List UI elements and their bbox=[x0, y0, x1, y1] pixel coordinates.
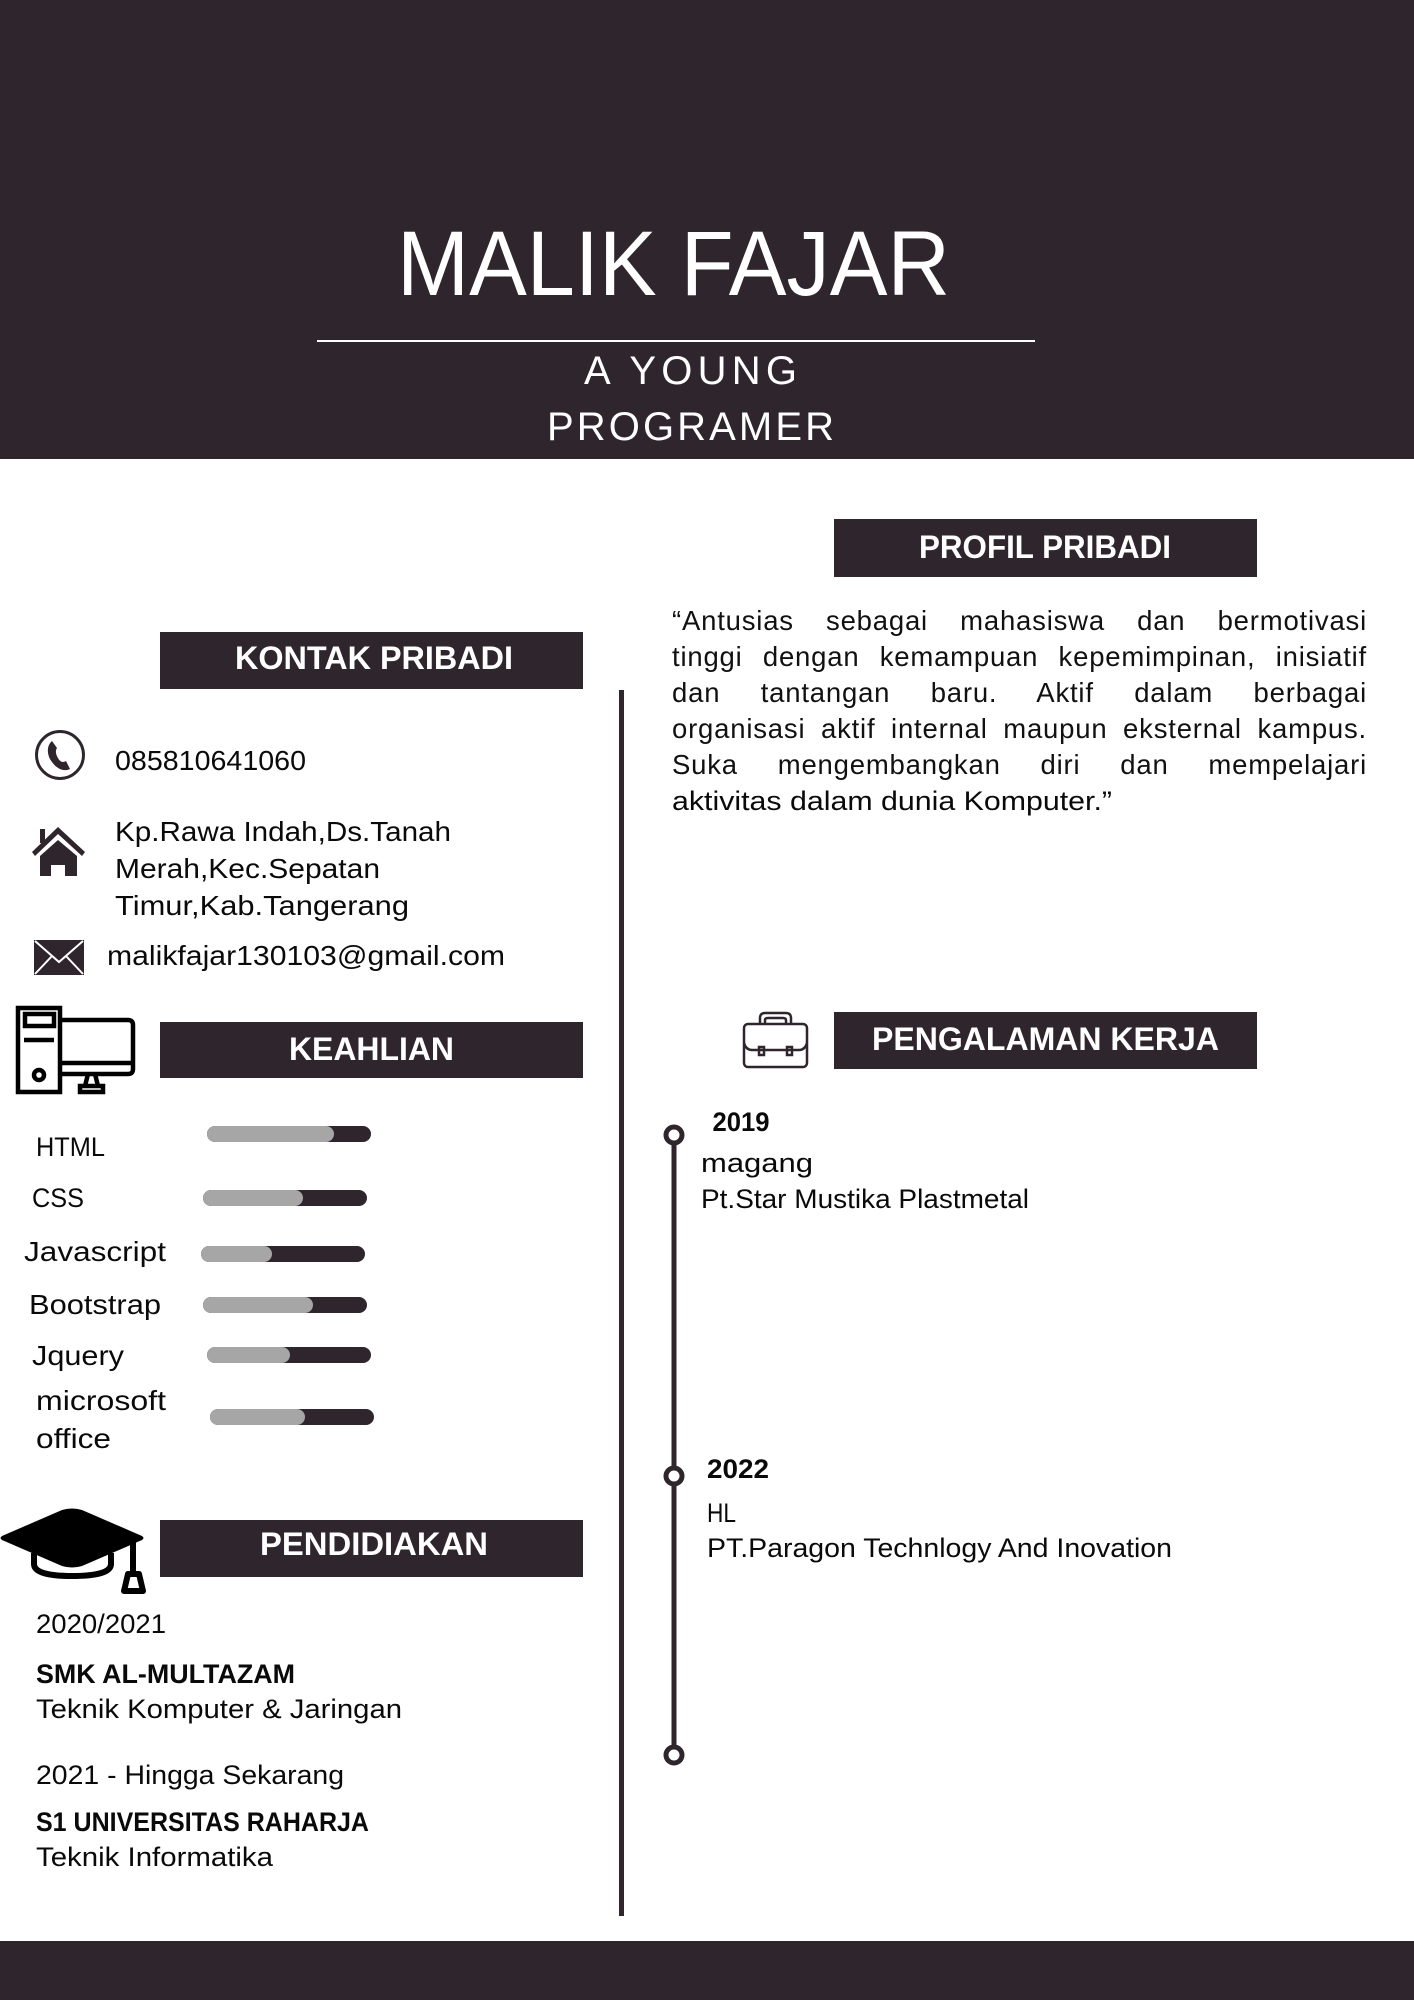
skill: css: CSS bbox=[32, 1183, 84, 1213]
icon: graduation cap bbox=[0, 1508, 144, 1591]
experience entry: 2019 bbox=[701, 1107, 1029, 1214]
address: Timur,Kab.Tangerang bbox=[115, 890, 409, 921]
skill: html: HTML bbox=[36, 1132, 105, 1162]
panel: profil pribadi bbox=[672, 519, 1372, 816]
profile paragraph: Suka mengembangkan diri dan mempelajari bbox=[672, 749, 1367, 780]
skill: css bbox=[32, 1183, 367, 1213]
skill: javascript bbox=[24, 1236, 365, 1267]
skill: microsoft office bbox=[36, 1385, 374, 1454]
experience entry: 2022: 2022 bbox=[707, 1454, 769, 1484]
address: Kp.Rawa Indah,Ds.Tanah bbox=[115, 816, 451, 847]
education entry: universitas: 2021 - Hingga Sekarang bbox=[36, 1760, 344, 1790]
experience entry: 2022 bbox=[707, 1454, 1172, 1563]
experience entry: 2022: HL bbox=[707, 1498, 736, 1528]
profile paragraph bbox=[672, 603, 1372, 816]
timeline bbox=[666, 1127, 682, 1763]
heading: kontak pribadi bbox=[160, 632, 583, 689]
subtitle: A YOUNG bbox=[584, 349, 797, 393]
panel: keahlian bbox=[18, 1008, 583, 1454]
heading: keahlian bbox=[160, 1022, 583, 1078]
skill: javascript: Javascript bbox=[24, 1236, 166, 1267]
experience entry: 2019: 2019 bbox=[712, 1107, 770, 1137]
icon: house bbox=[32, 827, 85, 876]
panel: kontak pribadi bbox=[32, 632, 583, 975]
header band bbox=[0, 0, 1414, 459]
education entry: smk bbox=[36, 1609, 402, 1724]
experience entry: 2022: PT.Paragon Technlogy And Inovation bbox=[707, 1533, 1172, 1563]
profile paragraph: tinggi dengan kemampuan kepemimpinan, inisiatif bbox=[672, 641, 1367, 672]
heading: pengalaman kerja: PENGALAMAN KERJA bbox=[872, 1021, 1219, 1057]
skill: bootstrap bbox=[29, 1289, 367, 1320]
icon: briefcase bbox=[744, 1013, 807, 1067]
heading: profil pribadi: PROFIL PRIBADI bbox=[919, 529, 1171, 565]
experience entry: 2019: Pt.Star Mustika Plastmetal bbox=[701, 1184, 1029, 1214]
skill: bootstrap: Bootstrap bbox=[29, 1289, 161, 1320]
education entry: universitas: Teknik Informatika bbox=[36, 1842, 274, 1872]
subtitle bbox=[547, 349, 834, 449]
heading: keahlian: KEAHLIAN bbox=[289, 1031, 454, 1067]
footer band bbox=[0, 1941, 1414, 2000]
panel: pendidikan bbox=[0, 1508, 583, 1872]
heading: pengalaman kerja bbox=[834, 1012, 1257, 1069]
icon: envelope bbox=[34, 940, 84, 975]
heading: pendidikan bbox=[160, 1520, 583, 1577]
profile paragraph: dan tantangan baru. Aktif dalam berbagai bbox=[672, 677, 1367, 708]
address: Merah,Kec.Sepatan bbox=[115, 853, 380, 884]
experience entry: 2019: magang bbox=[701, 1148, 813, 1178]
education entry: smk: SMK AL-MULTAZAM bbox=[36, 1659, 295, 1689]
profile paragraph: organisasi aktif internal maupun eksternal kampus. bbox=[672, 713, 1367, 744]
education entry: smk: Teknik Komputer & Jaringan bbox=[36, 1694, 402, 1724]
address bbox=[115, 816, 451, 921]
skill: jquery bbox=[32, 1340, 371, 1371]
skill: microsoft office: microsoft bbox=[36, 1385, 166, 1416]
email: malikfajar130103@gmail.com bbox=[107, 940, 505, 971]
panel: pengalaman kerja bbox=[666, 1012, 1257, 1763]
education entry: universitas: S1 UNIVERSITAS RAHARJA bbox=[36, 1807, 369, 1837]
skill: jquery: Jquery bbox=[32, 1340, 124, 1371]
subtitle: PROGRAMER bbox=[547, 405, 834, 449]
phone number: 085810641060 bbox=[115, 745, 306, 776]
skill: microsoft office: office bbox=[36, 1423, 111, 1454]
icon: phone bbox=[36, 732, 84, 778]
heading: kontak pribadi: KONTAK PRIBADI bbox=[235, 640, 513, 676]
heading: profil pribadi bbox=[834, 519, 1257, 577]
education entry: smk: 2020/2021 bbox=[36, 1609, 166, 1639]
name title: MALIK FAJAR bbox=[397, 213, 950, 315]
education entry: universitas bbox=[36, 1760, 369, 1872]
profile paragraph: aktivitas dalam dunia Komputer.” bbox=[672, 786, 1112, 816]
heading: pendidikan: PENDIDIAKAN bbox=[260, 1526, 488, 1562]
skill: html bbox=[36, 1126, 371, 1162]
icon: computer bbox=[18, 1008, 133, 1092]
profile paragraph: “Antusias sebagai mahasiswa dan bermotivasi bbox=[672, 605, 1367, 636]
